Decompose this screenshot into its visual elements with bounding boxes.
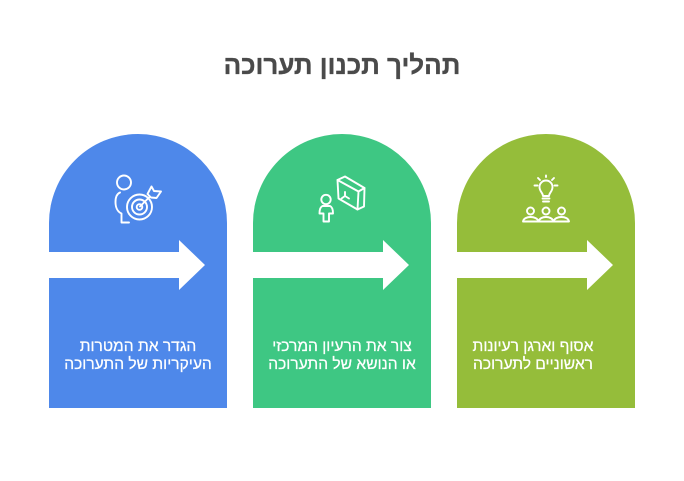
panel text: אסוף וארגן רעיונות (473, 338, 594, 355)
arrow (457, 240, 613, 290)
olive arch (457, 134, 635, 408)
arrow (253, 240, 409, 290)
panel: collect ideas (457, 134, 635, 408)
panel text: ראשוניים לתערוכה (473, 356, 593, 373)
panel: define goals (49, 134, 227, 408)
panel: shape central idea (253, 134, 431, 408)
panel text: העיקריות של התערוכה (64, 356, 212, 373)
panel text: הגדר את המטרות (80, 338, 196, 355)
icon: lightbulb above three people (523, 176, 569, 222)
icon: person with target (116, 176, 161, 222)
panel text: צור את הרעיון המרכזי (272, 338, 412, 355)
arrow (49, 240, 205, 290)
panel text (268, 338, 416, 373)
panel text: או הנושא של התערוכה (268, 356, 416, 373)
panel text (473, 338, 594, 373)
blue arch (49, 134, 227, 408)
panel text (64, 338, 212, 373)
title: תהליך תכנון תערוכה (224, 50, 460, 80)
green arch (253, 134, 431, 408)
icon: person with cube (320, 176, 364, 222)
